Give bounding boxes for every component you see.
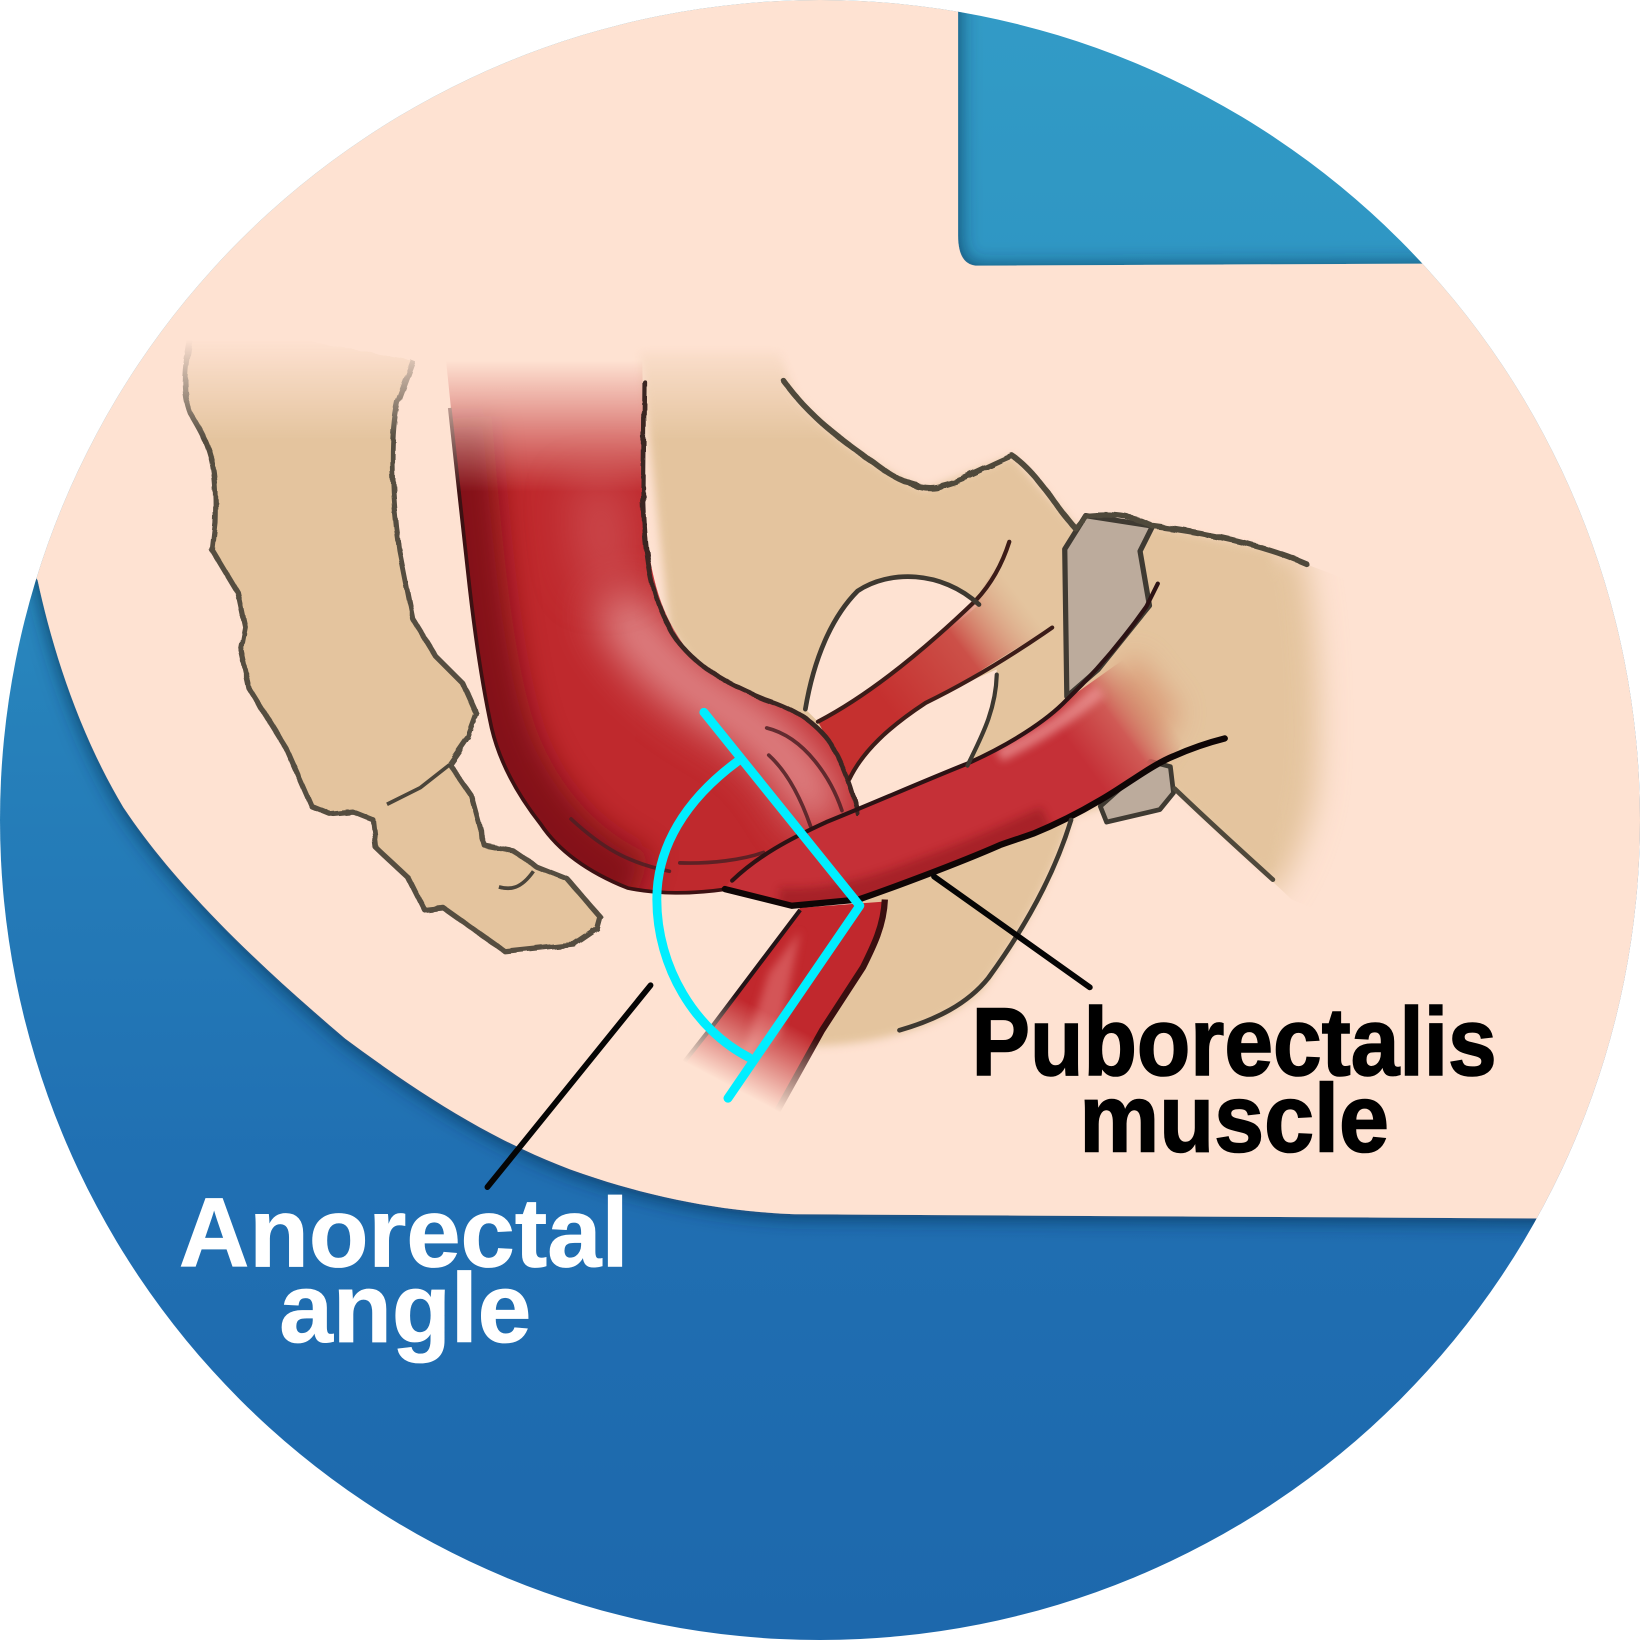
rectum body <box>446 356 860 899</box>
tan pubic bone and soft tissue <box>640 350 1319 1046</box>
lower right outline <box>1175 789 1273 880</box>
tan main area <box>640 350 1284 1046</box>
peach body panel <box>0 0 1640 1218</box>
sacrum and coccyx <box>185 319 600 952</box>
band end glow on tan tissue <box>1104 652 1186 746</box>
anal canal <box>682 899 885 1124</box>
anorectal angle marker in cyan <box>657 712 860 1098</box>
label: anorectal angle: angle <box>279 1253 531 1363</box>
coccyx detail lines <box>387 765 533 888</box>
label: puborectalis muscle: muscle <box>1079 1066 1389 1173</box>
obturator foramen opening <box>805 577 979 722</box>
rectum left edge <box>450 408 727 893</box>
band lower edge <box>725 738 1225 906</box>
label: anorectal angle <box>179 1178 629 1363</box>
foramen outline <box>805 577 979 709</box>
puborectalis muscle band <box>725 659 1187 906</box>
label: anorectal angle: Anorectal <box>179 1178 629 1288</box>
angle lines <box>704 712 860 1098</box>
rectum shading clipped to body <box>455 418 826 889</box>
soft tissue gap below rectum <box>669 899 800 1046</box>
obturator lower line <box>967 675 997 766</box>
tan right lobe fading edge <box>1140 523 1319 899</box>
band shadow <box>779 818 1046 900</box>
pubic upper outline <box>784 382 1306 564</box>
label: puborectalis muscle <box>972 989 1497 1173</box>
pointer: puborectalis <box>934 876 1090 987</box>
grey pubic symphysis disc <box>1065 516 1153 697</box>
pointer: anorectal angle <box>487 985 651 1187</box>
rectum inner highlight <box>617 596 826 821</box>
band highlight <box>999 690 1100 755</box>
levator branch <box>819 578 1034 776</box>
rectal outline <box>571 382 1306 1030</box>
rectum fold marks <box>571 728 842 871</box>
branch edges <box>818 542 1009 722</box>
grey lower disc <box>1100 761 1174 822</box>
angle arc <box>657 761 749 1057</box>
rectum inner edge <box>643 382 858 814</box>
rectum <box>446 356 860 899</box>
inferior tissue outline <box>899 820 1071 1030</box>
rectum left dark shading <box>455 418 638 889</box>
label: puborectalis muscle: Puborectalis <box>972 989 1497 1096</box>
band upper edge <box>732 584 1158 881</box>
gap between levator branch and puborectalis <box>849 669 997 807</box>
band shading clipped to band <box>779 690 1100 900</box>
rectum top light shading <box>596 481 609 586</box>
